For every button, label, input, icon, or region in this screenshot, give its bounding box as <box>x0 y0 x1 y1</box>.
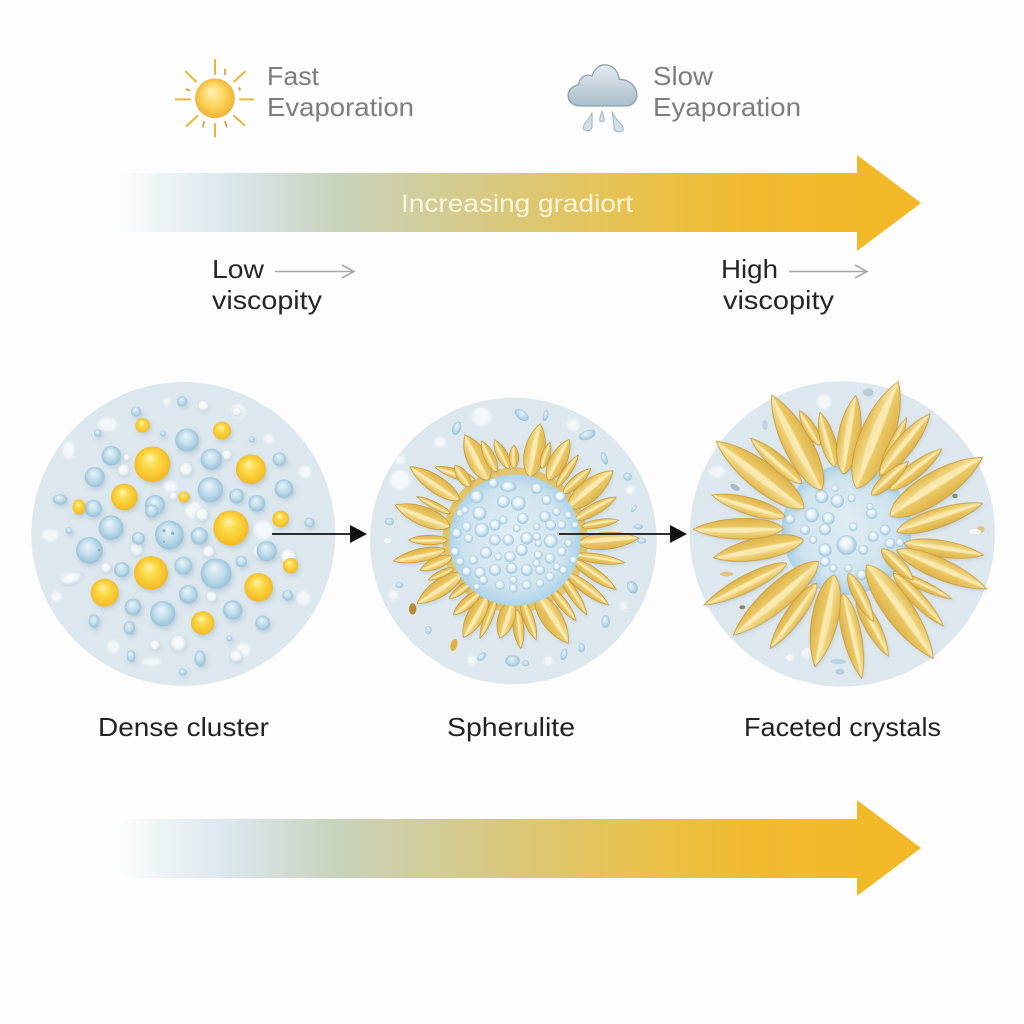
arrow: bottom gradient <box>120 800 921 896</box>
panel: dense cluster <box>31 382 335 686</box>
icon: sun <box>176 60 253 137</box>
debris <box>709 388 985 675</box>
particles: pale <box>59 400 296 662</box>
spherulite core <box>449 474 581 606</box>
particles: yellow <box>73 418 298 635</box>
arrow: high viscosity <box>789 265 867 278</box>
label: low viscosity: viscopity <box>212 285 322 315</box>
caption: dense cluster: Dense cluster <box>98 712 269 742</box>
label: high viscosity <box>721 254 867 315</box>
arrow: cluster to spherulite <box>272 525 367 543</box>
crystal core <box>782 465 912 595</box>
label: low viscosity: Low <box>212 254 264 284</box>
arrow label: Increasing gradiort <box>401 190 633 218</box>
label: slow evaporation: Slow <box>653 61 713 91</box>
legend: slow evaporation <box>568 61 801 132</box>
label: slow evaporation: Eyaporation <box>653 92 801 122</box>
debris <box>383 407 646 667</box>
caption: spherulite: Spherulite <box>447 712 575 742</box>
needles <box>392 422 639 649</box>
icon: rain cloud <box>568 65 637 132</box>
legend: fast evaporation <box>176 60 414 137</box>
particles: blue <box>53 396 314 675</box>
panel: faceted crystals <box>690 375 995 687</box>
crystal blades <box>693 375 991 680</box>
label: fast evaporation: Evaporation <box>267 92 414 122</box>
arrow: increasing gradient <box>120 155 921 251</box>
caption: faceted crystals: Faceted crystals <box>744 712 941 742</box>
label: fast evaporation: Fast <box>267 61 320 91</box>
panel: spherulite <box>370 398 657 684</box>
label: high viscosity: viscopity <box>723 285 834 315</box>
arrow: spherulite to crystals <box>559 525 687 543</box>
label: fast evaporation <box>267 61 414 122</box>
label: high viscosity: High <box>721 254 778 284</box>
arrow: low viscosity <box>275 265 354 278</box>
label: low viscosity <box>212 254 354 315</box>
label: slow evaporation <box>653 61 801 122</box>
